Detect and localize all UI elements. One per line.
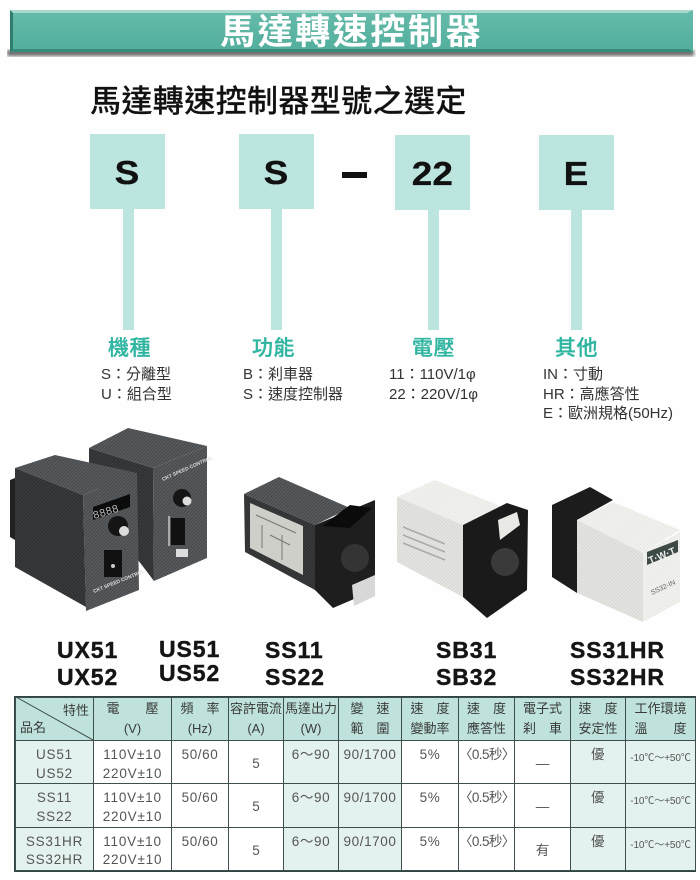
table row: SS11 SS22: 5%: [420, 790, 440, 805]
table header row: 變 速: [350, 701, 390, 716]
specification table: [14, 696, 696, 872]
title banner: [7, 10, 696, 57]
table header row: (Hz): [188, 721, 212, 736]
table row: US51 US52: 優: [591, 747, 605, 762]
table row: SS31HR SS32HR: 有: [536, 843, 549, 858]
code box: S machine type: [90, 134, 165, 209]
model name: SS31HR SS32HR: SS32HR: [570, 664, 665, 690]
table header row: 容許電流: [230, 701, 282, 716]
table row: US51 US52: —: [536, 756, 549, 771]
table row: SS11 SS22: 5: [252, 799, 260, 814]
table row: SS11 SS22: 90/1700: [344, 790, 396, 805]
table row: SS31HR SS32HR: 〈0.5秒〉: [459, 834, 514, 849]
code box: 22 voltage: 22: [412, 155, 453, 192]
code box: 22 voltage: [395, 135, 470, 210]
category: voltage: 電壓: [412, 337, 455, 360]
product: UX51 controller: 8888: [92, 504, 120, 523]
product: SS31HR relay unit: SS32-IN: [650, 579, 677, 597]
category: other: E：歐洲規格(50Hz): [543, 405, 673, 422]
table row: SS11 SS22: -10℃～+50℃: [630, 796, 691, 807]
category: machine type: [101, 336, 172, 402]
category: voltage: 22：220V/1φ: [389, 386, 478, 402]
table row: SS31HR SS32HR: SS31HR: [26, 834, 83, 849]
model name: US51 US52: [159, 636, 220, 686]
table row: SS31HR SS32HR: [16, 828, 695, 870]
code box: S machine type: S: [115, 154, 140, 191]
code box: S function: S: [264, 154, 289, 191]
table row: SS31HR SS32HR: 5: [252, 843, 260, 858]
product photos: [10, 428, 680, 622]
category: other: HR：高應答性: [543, 386, 640, 402]
table row: SS11 SS22: 優: [591, 790, 605, 805]
table header row: 速 度: [578, 701, 618, 716]
table row: SS11 SS22: [16, 784, 695, 827]
table header row: 應答性: [467, 721, 506, 736]
table row: US51 US52: 110V±10: [103, 747, 162, 762]
model name: SS11 SS22: SS11: [265, 637, 324, 663]
model name: SB31 SB32: SB31: [436, 637, 497, 663]
table row: SS11 SS22: SS22: [36, 809, 73, 824]
table row: SS31HR SS32HR: 90/1700: [344, 834, 396, 849]
table header row: 馬達出力: [285, 701, 337, 716]
category: voltage: 11：110V/1φ: [389, 366, 476, 383]
dash: [342, 172, 367, 178]
category: other: [543, 336, 673, 422]
table row: SS11 SS22: 50/60: [182, 790, 218, 805]
table row: US51 US52: 5: [252, 756, 260, 771]
table row: SS11 SS22: SS11: [37, 790, 72, 805]
table row: US51 US52: 〈0.5秒〉: [459, 747, 514, 762]
code box: S function: [239, 134, 314, 209]
product: SB31 relay unit: [397, 480, 528, 618]
product: SS31HR relay unit: T·W·T: [647, 546, 677, 567]
category: function: 功能: [252, 337, 295, 360]
model name: US51 US52: US52: [159, 660, 220, 686]
model name: UX51 UX52: UX52: [57, 664, 118, 690]
table header row: 速 度: [467, 701, 506, 716]
table row: US51 US52: 5%: [420, 747, 440, 762]
model name: US51 US52: US51: [159, 636, 220, 662]
category: function: [243, 336, 343, 402]
table header row: 溫 度: [634, 721, 686, 736]
table header row: 頻 率: [180, 701, 220, 716]
table header row: (V): [124, 721, 141, 736]
table row: US51 US52: 220V±10: [103, 766, 162, 780]
model name: SS11 SS22: SS22: [265, 664, 325, 690]
table header row: 電子式: [523, 701, 562, 716]
table header row: 工作環境: [634, 701, 686, 716]
table row: SS31HR SS32HR: SS32HR: [26, 852, 83, 867]
table row: US51 US52: US52: [36, 766, 73, 780]
table header row: 刹 車: [523, 721, 562, 736]
table row: SS11 SS22: 110V±10: [103, 790, 162, 805]
table row: SS31HR SS32HR: -10℃～+50℃: [630, 840, 691, 851]
table header row: 變動率: [410, 721, 450, 736]
product: SS31HR relay unit: [552, 487, 680, 622]
category: function: S：速度控制器: [243, 386, 343, 402]
model name: SB31 SB32: [436, 637, 497, 690]
table row: US51 US52: 90/1700: [344, 747, 396, 762]
table row: SS11 SS22: 〈0.5秒〉: [459, 790, 514, 805]
table row: SS31HR SS32HR: 220V±10: [103, 852, 162, 867]
table header row: (W): [301, 721, 321, 736]
category: machine type: S：分離型: [101, 366, 171, 383]
table row: US51 US52: -10℃～+50℃: [630, 753, 691, 764]
table row: US51 US52: [16, 741, 695, 783]
table header row: 電 壓: [106, 701, 158, 716]
code box: E other: [539, 135, 614, 210]
product: UX51 controller: [10, 455, 145, 611]
code box: E other: E: [564, 155, 589, 192]
product: UX51 controller: CKT SPEED CONTROL: [93, 569, 145, 595]
model name: SS31HR SS32HR: SS31HR: [570, 637, 665, 663]
table row: US51 US52: 50/60: [182, 747, 218, 762]
table header row: 特性: [63, 703, 89, 718]
model name: UX51 UX52: UX51: [57, 637, 118, 663]
heading: model selection: 馬達轉速控制器型號之選定: [90, 84, 467, 119]
product: US51 controller: [89, 428, 214, 581]
category: function: B：刹車器: [243, 366, 313, 383]
table header row: 範 圍: [350, 721, 390, 736]
table header row: 速 度: [410, 701, 450, 716]
table row: SS11 SS22: —: [536, 799, 549, 814]
code diagram: [90, 134, 614, 330]
category: voltage: [389, 337, 478, 402]
model name: SS31HR SS32HR: [570, 637, 665, 690]
table row: SS31HR SS32HR: 110V±10: [103, 834, 162, 849]
table row: SS11 SS22: 220V±10: [103, 809, 162, 824]
model name: SS11 SS22: [265, 637, 325, 690]
table row: SS31HR SS32HR: 優: [591, 834, 605, 849]
category: machine type: 機種: [108, 337, 151, 360]
table header row: 品名: [20, 720, 46, 735]
table row: SS11 SS22: 6～90: [292, 790, 330, 805]
table row: US51 US52: 6～90: [292, 747, 330, 762]
model name: SB31 SB32: SB32: [436, 664, 497, 690]
table header row: 安定性: [578, 721, 618, 736]
table header row: [16, 698, 695, 870]
product: US51 controller: CKT SPEED CONTROL: [161, 455, 214, 483]
product: SS11 relay unit: [244, 477, 375, 608]
category: other: 其他: [555, 337, 598, 360]
category: other: IN：寸動: [543, 366, 603, 383]
table row: SS31HR SS32HR: 6～90: [292, 834, 330, 849]
model name: UX51 UX52: [57, 637, 118, 690]
category: machine type: U：組合型: [101, 386, 172, 402]
title banner: 馬達轉速控制器: [220, 13, 483, 52]
table row: SS31HR SS32HR: 5%: [420, 834, 440, 849]
table row: US51 US52: US51: [36, 747, 73, 762]
table row: SS31HR SS32HR: 50/60: [182, 834, 218, 849]
table header row: (A): [247, 721, 265, 736]
